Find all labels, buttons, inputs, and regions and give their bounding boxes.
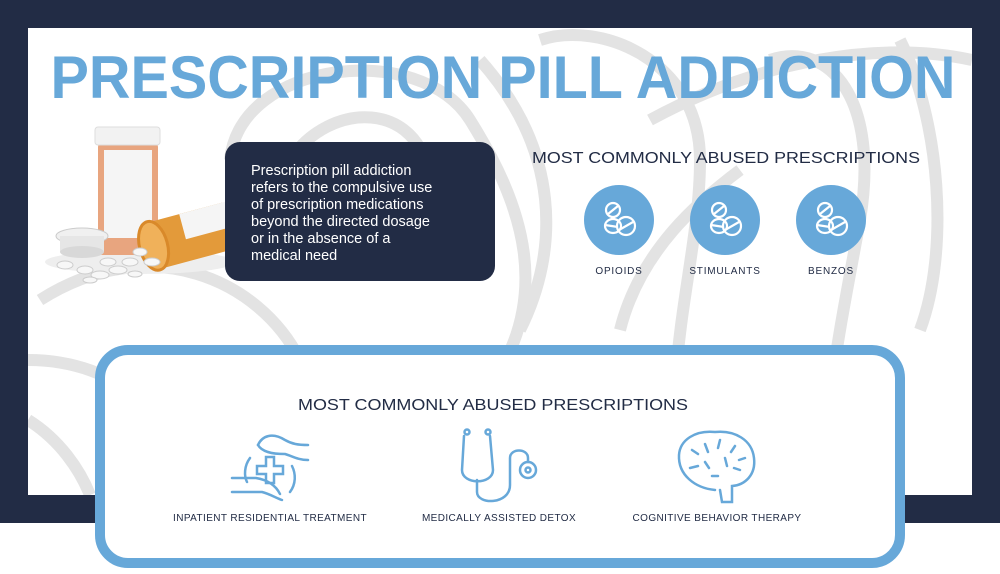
definition box: medical need <box>251 248 337 264</box>
background curves <box>28 35 972 495</box>
icon: brain <box>679 432 754 502</box>
title: PRESCRIPTION PILL ADDICTION <box>50 44 956 111</box>
panel heading: MOST COMMONLY ABUSED PRESCRIPTIONS <box>298 397 688 414</box>
heading: most commonly abused: MOST COMMONLY ABUSED PRESCRIPTIONS <box>532 150 920 167</box>
labels: OPIOIDS <box>595 266 643 277</box>
treatment labels: COGNITIVE BEHAVIOR THERAPY <box>633 513 801 524</box>
icon: stethoscope <box>462 430 536 501</box>
labels <box>595 266 854 277</box>
labels: STIMULANTS <box>689 266 761 277</box>
icon: hands with cross <box>232 436 308 500</box>
icon: benzos <box>796 185 866 255</box>
definition box: Prescription pill addiction <box>251 163 411 179</box>
definition box: of prescription medications <box>251 197 423 213</box>
treatment labels <box>173 513 801 524</box>
definition box: or in the absence of a <box>251 231 391 247</box>
icon: stimulants <box>690 185 760 255</box>
treatment labels: MEDICALLY ASSISTED DETOX <box>422 513 576 524</box>
pill bottles illustration <box>45 127 240 283</box>
labels: BENZOS <box>808 266 854 277</box>
treatment labels: INPATIENT RESIDENTIAL TREATMENT <box>173 513 367 524</box>
treatment panel <box>100 350 900 563</box>
icon: opioids <box>584 185 654 255</box>
definition box: beyond the directed dosage <box>251 214 430 230</box>
definition box <box>225 142 495 281</box>
definition box: refers to the compulsive use <box>251 180 432 196</box>
